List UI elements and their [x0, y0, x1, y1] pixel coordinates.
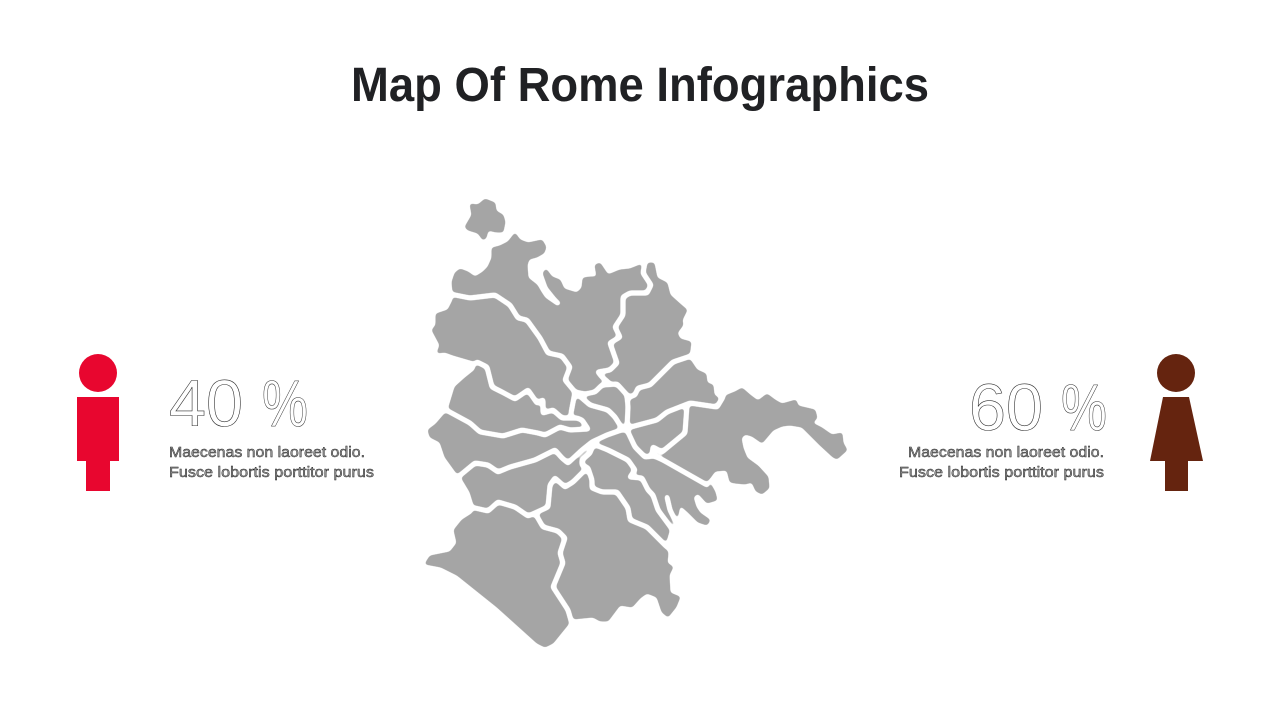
text block: right description	[899, 444, 1104, 481]
text block: left description: Maecenas non laoreet odio.	[169, 444, 365, 461]
map of Rome	[410, 190, 860, 660]
district boundaries	[446, 262, 723, 624]
stat: 60 percent: %	[1061, 370, 1107, 444]
icon: red male figure	[77, 354, 119, 491]
text block: right description: Maecenas non laoreet odio.	[908, 444, 1104, 461]
stat: 60 percent	[969, 370, 1107, 444]
stat: 40 percent: 40	[169, 366, 243, 440]
northern exclave	[465, 199, 505, 240]
text block: left description: Fusce lobortis porttitor purus	[169, 464, 374, 481]
stat: 40 percent	[169, 366, 308, 440]
text block: right description: Fusce lobortis porttitor purus	[899, 464, 1104, 481]
stat: 40 percent: %	[262, 366, 308, 440]
text block: left description	[169, 444, 374, 481]
main territory	[425, 233, 847, 647]
stat: 60 percent: 60	[969, 370, 1043, 444]
title: Map Of Rome Infographics	[351, 59, 929, 112]
icon: brown female figure	[1150, 354, 1203, 491]
